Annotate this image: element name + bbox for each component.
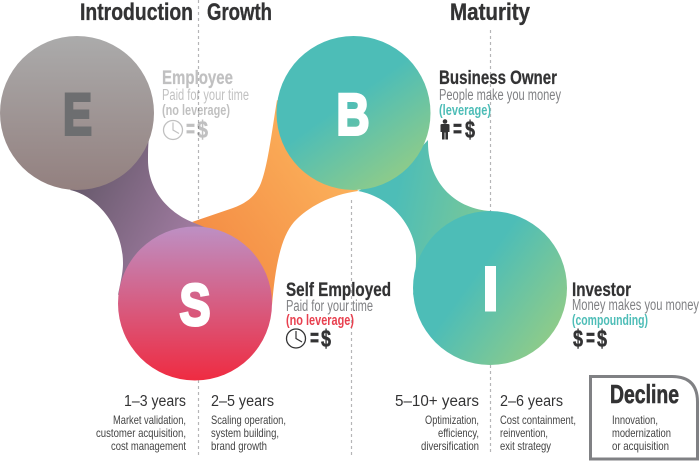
stage detail: 2-6 years: reinvention, xyxy=(500,426,548,440)
stage detail: 1-3 years: 1–3 years xyxy=(124,393,186,410)
stage detail: 5-10+ years: 5–10+ years xyxy=(395,393,479,410)
icon: dollar equals dollar: = xyxy=(586,325,595,352)
icon: clock equals dollar: = xyxy=(310,325,319,352)
callout: Decline xyxy=(590,376,698,459)
letter E: E xyxy=(63,82,92,148)
icon: person equals dollar: $ xyxy=(465,116,475,144)
callout: Decline: modernization xyxy=(612,426,671,440)
icon: person equals dollar xyxy=(440,116,475,144)
icon: dollar equals dollar: $ xyxy=(573,326,583,352)
text block: Self Employed: Paid for your time xyxy=(286,298,373,315)
icon: person equals dollar: = xyxy=(453,116,462,143)
text block: Employee: Paid for your time xyxy=(162,87,249,104)
icon: clock equals dollar xyxy=(286,325,331,352)
text block: Employee xyxy=(162,68,249,144)
icon: clock equals dollar: $ xyxy=(321,326,331,352)
icon: dollar equals dollar: $ xyxy=(597,326,607,352)
stage detail: 5-10+ years: diversification xyxy=(421,439,479,453)
letter I xyxy=(485,266,496,312)
stage divider lines xyxy=(198,0,490,456)
icon: clock equals dollar xyxy=(164,116,209,144)
text block: Self Employed: (no leverage) xyxy=(286,312,354,329)
stage detail: 1-3 years xyxy=(96,393,187,453)
stage detail: 2-6 years: 2–6 years xyxy=(500,393,563,410)
stage detail: 2-5 years: 2–5 years xyxy=(211,393,274,410)
callout: Decline: or acquisition xyxy=(612,439,669,453)
stage headings xyxy=(80,0,531,26)
stage detail: 2-5 years: system building, xyxy=(211,426,279,440)
stage detail: 5-10+ years: efficiency, xyxy=(438,426,479,440)
callout: Decline: Decline xyxy=(610,379,679,409)
stage detail: 5-10+ years xyxy=(395,393,479,453)
text block: Business Owner xyxy=(439,68,561,144)
text block: Business Owner: (leverage) xyxy=(439,102,491,119)
text block: Self Employed xyxy=(286,280,391,352)
stage detail: 2-5 years: Scaling operation, xyxy=(211,413,286,427)
stage detail: 2-6 years: exit strategy xyxy=(500,439,551,453)
connector: E to S xyxy=(70,138,218,295)
stage detail: 5-10+ years: Optimization, xyxy=(425,413,479,427)
text block: Employee: (no leverage) xyxy=(162,102,230,119)
stage detail: 1-3 years: customer acquisition, xyxy=(96,426,186,440)
icon: dollar equals dollar xyxy=(573,325,607,352)
stage detail: 2-6 years: Cost containment, xyxy=(500,413,576,427)
stage detail: 1-3 years: cost management xyxy=(111,439,187,453)
text block: Investor: (compounding) xyxy=(572,312,648,329)
connector: B to I xyxy=(358,140,490,295)
text block: Self Employed: Self Employed xyxy=(286,280,391,301)
text block: Investor: Investor xyxy=(572,280,631,301)
text block: Business Owner: Business Owner xyxy=(439,68,557,89)
text block: Employee: Employee xyxy=(162,68,233,89)
text block: Investor xyxy=(572,280,699,352)
icon: clock equals dollar: = xyxy=(186,116,195,143)
circle B xyxy=(276,36,430,190)
stage detail: 2-6 years xyxy=(500,393,576,453)
stage detail: 2-5 years xyxy=(211,393,286,453)
text block: Business Owner: People make you money xyxy=(439,87,561,104)
circle S xyxy=(118,226,272,380)
circle E xyxy=(0,36,154,190)
connector: S to B xyxy=(192,100,358,305)
letter B: B xyxy=(336,82,370,148)
circle I xyxy=(413,211,567,365)
letter S: S xyxy=(180,273,210,338)
icon: clock equals dollar: $ xyxy=(197,116,209,144)
stage detail: 1-3 years: Market validation, xyxy=(113,413,186,427)
stage detail: 2-5 years: brand growth xyxy=(211,439,267,453)
callout: Decline: Innovation, xyxy=(612,413,658,427)
